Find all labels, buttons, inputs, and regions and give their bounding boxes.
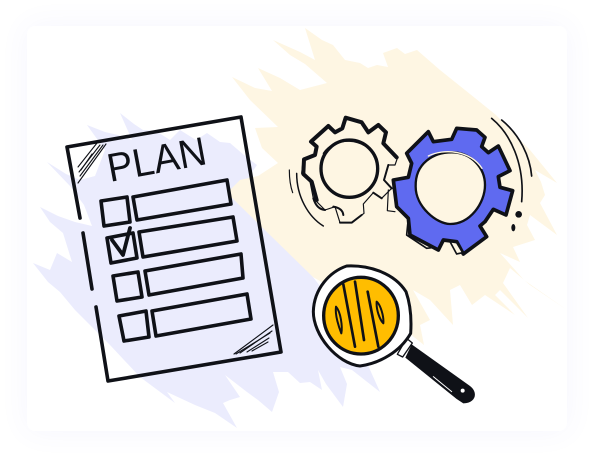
magnifying glass <box>313 266 475 403</box>
collar <box>397 338 412 357</box>
corner hatching bottom-right <box>234 325 273 354</box>
lens hatch lines <box>336 282 383 347</box>
row 2 with checked box <box>107 217 237 263</box>
gear: blue <box>387 128 513 254</box>
brush stroke: lavender <box>33 113 380 428</box>
document: plan sheet <box>67 117 281 381</box>
brush stroke: cream <box>227 28 567 345</box>
panel: card background <box>27 26 567 431</box>
row 1 <box>101 180 231 226</box>
dots <box>511 211 522 231</box>
row 4 <box>119 294 251 341</box>
heading: PLAN: PLAN <box>104 129 210 191</box>
handle <box>405 344 475 403</box>
motion lines left <box>289 170 323 226</box>
gear: small outlined <box>302 117 397 223</box>
lens yellow <box>324 277 398 354</box>
motion lines right <box>492 118 532 202</box>
row 3 <box>113 254 243 301</box>
corner hatching top-left <box>78 143 106 183</box>
document outline <box>67 117 281 381</box>
lens frame <box>313 266 411 366</box>
gears <box>289 117 532 254</box>
